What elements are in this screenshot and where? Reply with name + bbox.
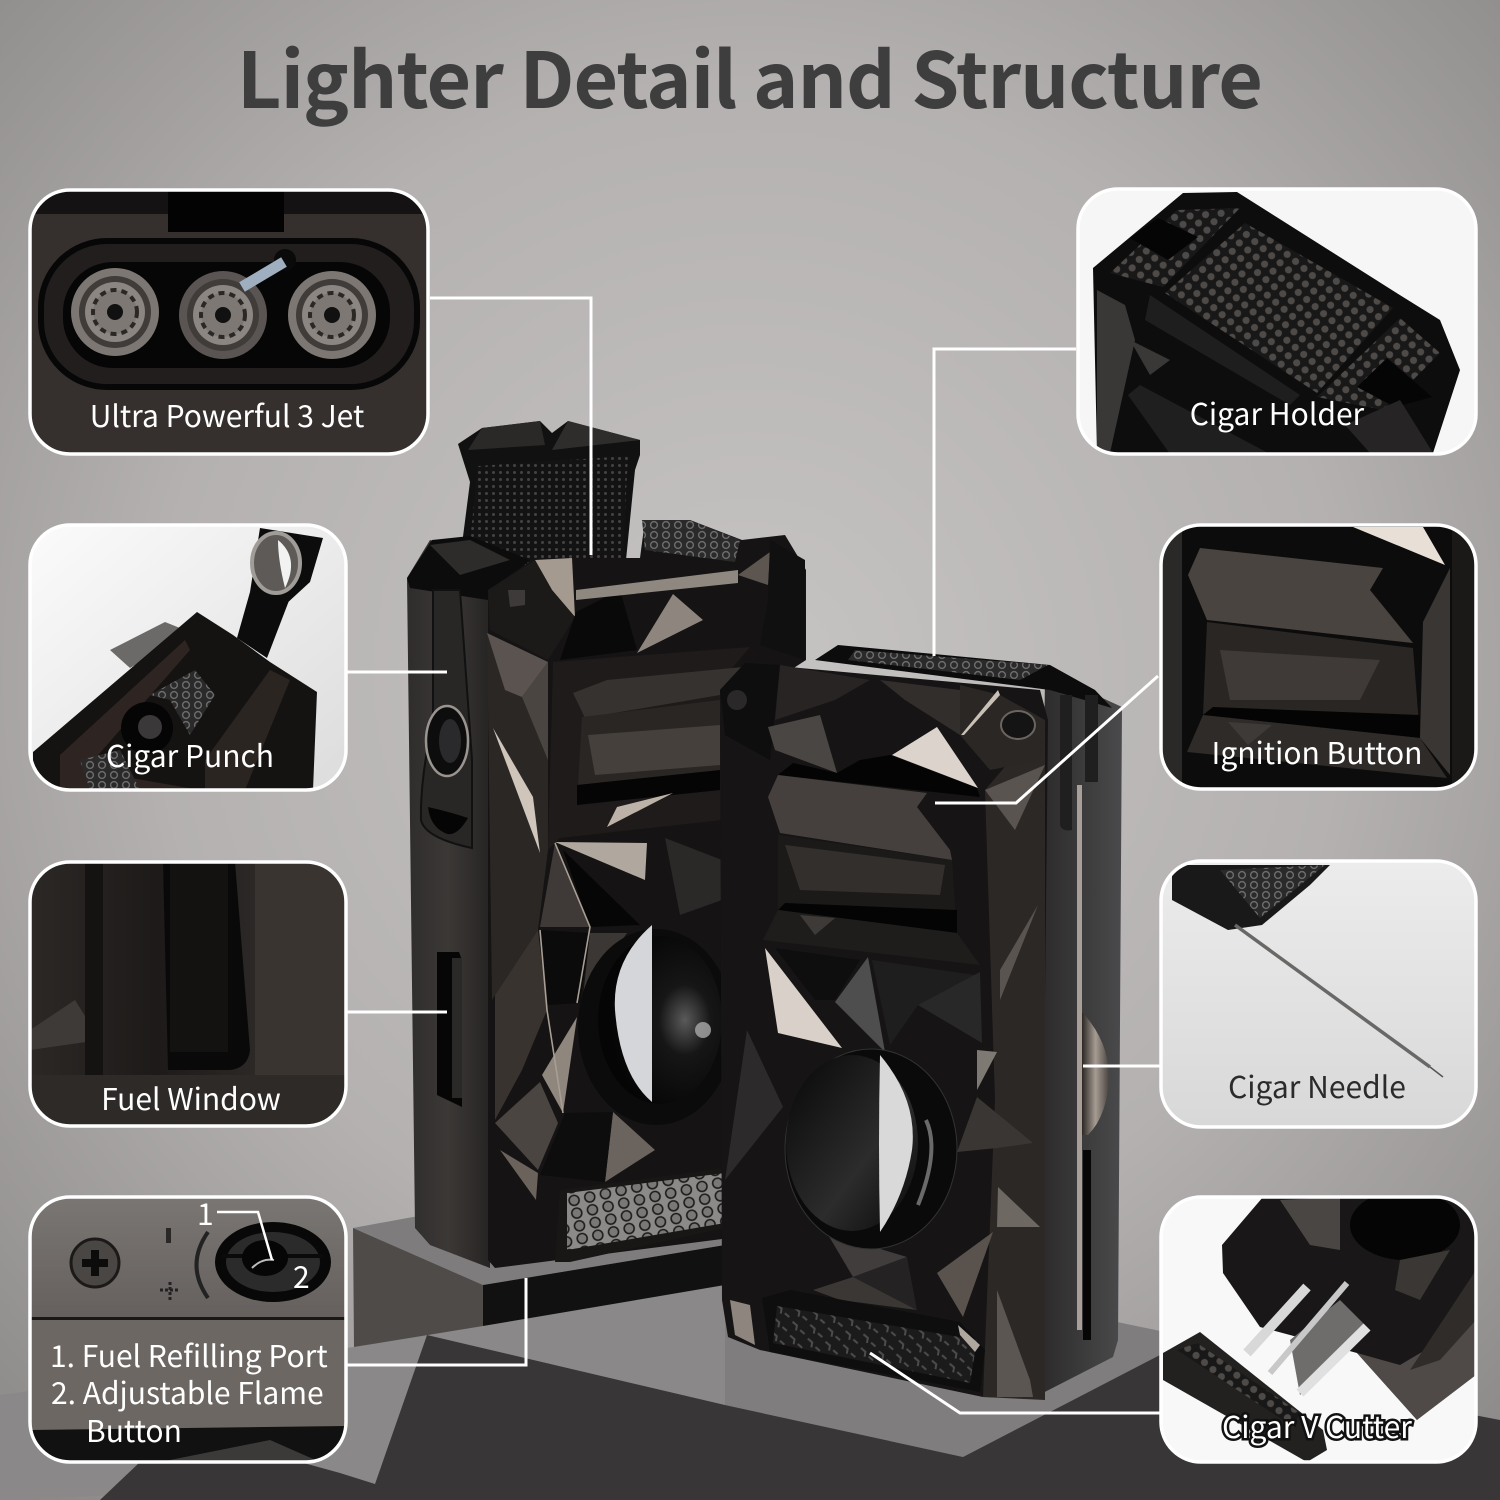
lighter front body — [720, 663, 1048, 1398]
right side face — [1033, 680, 1122, 1398]
label — [50, 1332, 328, 1451]
label: 2. Adjustable Flame — [51, 1369, 324, 1413]
screw — [71, 1239, 119, 1287]
head facets — [720, 663, 780, 760]
punch ring — [252, 533, 300, 593]
label: Cigar V Cutter — [1222, 1403, 1412, 1447]
panel: ignition button — [1161, 525, 1476, 789]
lower facets — [555, 842, 647, 880]
panel: cigar holder — [1078, 189, 1476, 454]
left cigar cutter — [578, 925, 734, 1125]
label: Cigar Holder — [1190, 390, 1365, 434]
panel: ultra powerful 3 jet — [30, 190, 428, 454]
jet 3 — [288, 271, 376, 359]
callout numbers: 2 — [293, 1253, 310, 1297]
panel: fuel window — [30, 862, 346, 1126]
panel: cigar punch — [30, 525, 346, 790]
label: Button — [86, 1407, 182, 1451]
raised lid with mesh — [458, 421, 640, 570]
panel: cigar needle — [1161, 861, 1476, 1127]
jet 1 — [71, 268, 159, 356]
jet 2 — [179, 271, 267, 359]
cutter rails — [1247, 1283, 1370, 1395]
label: Cigar Punch — [106, 732, 274, 776]
main face — [488, 520, 806, 1268]
callout numbers — [197, 1190, 310, 1297]
flame dial — [215, 1222, 331, 1302]
label: Ultra Powerful 3 Jet — [90, 392, 364, 436]
ignition button — [768, 775, 952, 860]
panel: cigar v cutter — [1161, 1190, 1476, 1462]
left side face — [407, 540, 490, 1268]
label: 1. Fuel Refilling Port — [50, 1332, 328, 1376]
callout numbers: 1 — [197, 1190, 214, 1234]
left lower mesh grip — [555, 1168, 725, 1262]
connector lines — [346, 298, 1160, 1413]
label: Ignition Button — [1212, 729, 1422, 773]
mesh top strip — [815, 645, 1112, 708]
side needle slot and dome — [1077, 785, 1109, 1340]
side button recess — [421, 590, 472, 848]
left lighter product — [407, 421, 806, 1268]
fuel window slit — [437, 952, 462, 1107]
right cigar cutter — [785, 1049, 957, 1249]
label: Cigar Needle — [1228, 1063, 1406, 1107]
side clips — [1060, 695, 1098, 830]
label: Fuel Window — [101, 1075, 281, 1119]
right lower mesh grip — [762, 1290, 985, 1392]
title: Lighter Detail and Structure — [237, 20, 1263, 131]
button housing — [548, 647, 750, 850]
right lighter product — [720, 645, 1122, 1400]
bright and dark lower facets — [765, 948, 842, 1048]
panel: fuel refilling port and flame button — [30, 1190, 346, 1462]
